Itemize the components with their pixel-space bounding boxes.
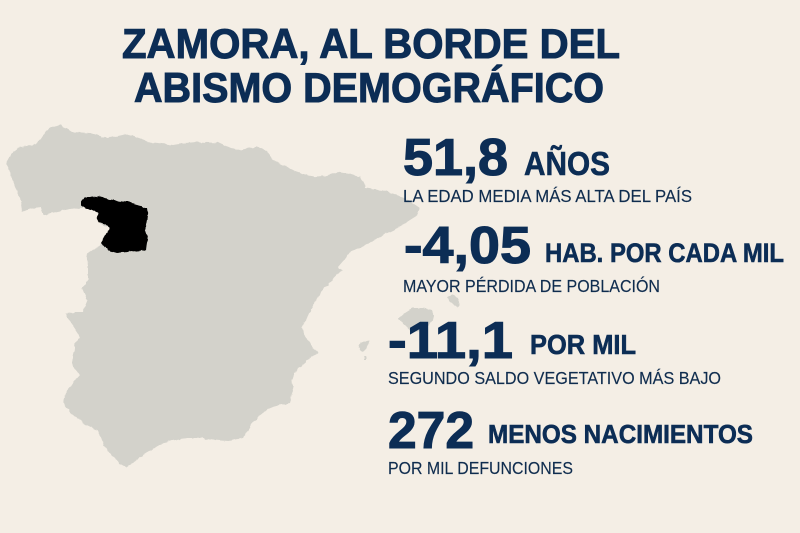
stat: fewer births: 272 [388, 402, 474, 460]
province of Zamora highlighted [81, 196, 148, 253]
stat: natural balance [388, 312, 721, 388]
stat: fewer births: MENOS NACIMIENTOS [488, 419, 753, 449]
mainland silhouette [7, 125, 420, 467]
stat: natural balance: -11,1 [388, 312, 513, 370]
title [122, 20, 620, 111]
island: Mallorca [398, 308, 434, 333]
stat: natural balance: SEGUNDO SALDO VEGETATIVO MÁS BAJO [388, 368, 721, 388]
stat: fewer births [388, 402, 753, 478]
stat: natural balance: POR MIL [530, 329, 636, 360]
stat: mean age: 51,8 [403, 129, 508, 187]
island: Menorca [447, 295, 460, 308]
stat: mean age: AÑOS [524, 145, 610, 182]
stat: mean age: LA EDAD MEDIA MÁS ALTA DEL PAÍS [403, 186, 692, 206]
island: Formentera [364, 356, 366, 360]
stat: population loss [403, 217, 784, 296]
title: ZAMORA, AL BORDE DEL [122, 20, 620, 67]
stat: population loss: -4,05 [404, 217, 531, 275]
map of Spain [7, 125, 460, 467]
stat: mean age [403, 129, 692, 206]
stat: fewer births: POR MIL DEFUNCIONES [388, 458, 573, 478]
island: Ibiza [358, 340, 370, 352]
stat: population loss: MAYOR PÉRDIDA DE POBLACIÓN [403, 275, 660, 296]
title: ABISMO DEMOGRÁFICO [134, 64, 604, 111]
